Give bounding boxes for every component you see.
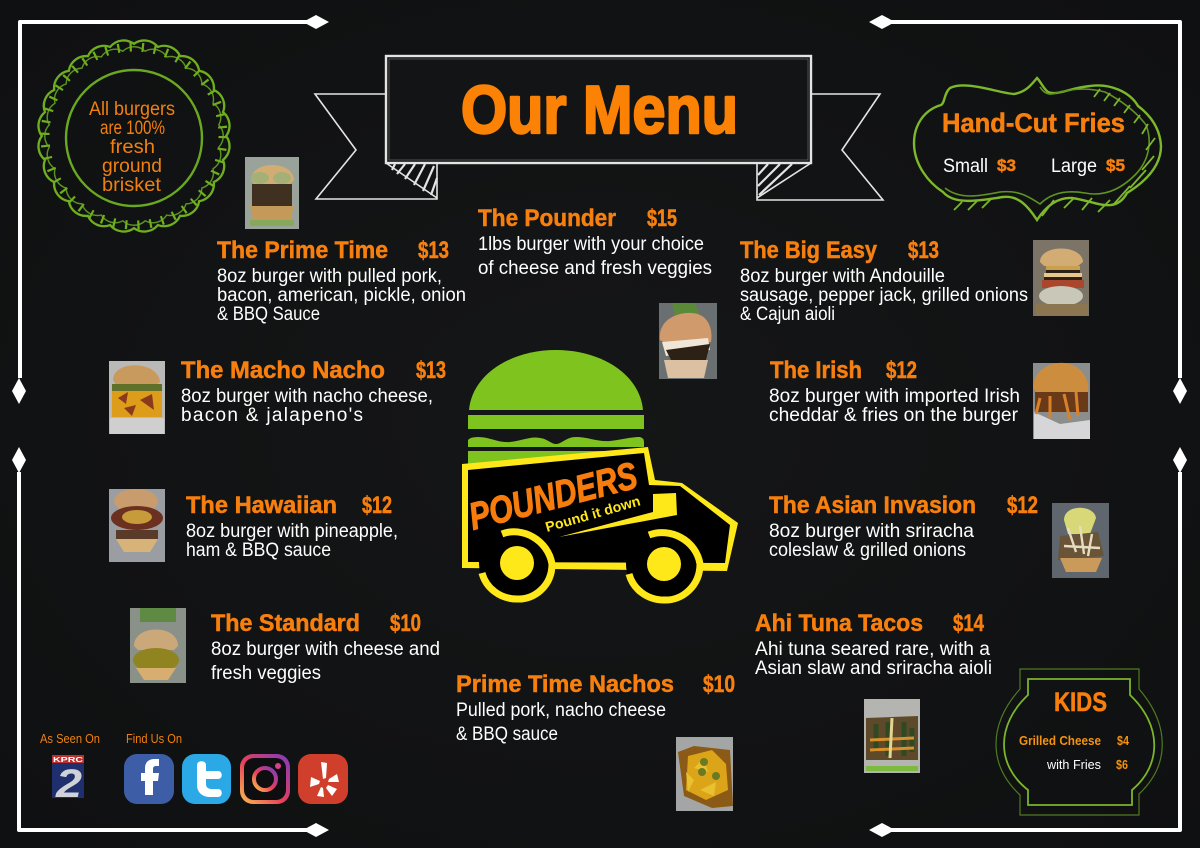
photo: hawaiian burger <box>109 489 165 562</box>
item: The Asian Invasion <box>769 492 1038 561</box>
panel: hand-cut fries: $5 <box>1106 156 1125 175</box>
photo: macho nacho burger <box>109 361 165 434</box>
icon: burger <box>468 350 644 471</box>
item: Prime Time Nachos: Pulled pork, nacho cheese <box>456 700 666 721</box>
icon: KPRC 2: KPRC <box>53 757 83 764</box>
item: The Macho Nacho: bacon & jalapeno's <box>181 405 363 426</box>
item: The Prime Time: The Prime Time <box>217 237 388 264</box>
item: The Pounder: $15 <box>647 205 677 232</box>
item: The Prime Time: $13 <box>418 237 449 264</box>
item: The Asian Invasion: The Asian Invasion <box>769 492 976 519</box>
item: The Macho Nacho: 8oz burger with nacho cheese, <box>181 386 433 407</box>
photo: pounder burger <box>659 303 717 379</box>
item: The Hawaiian: The Hawaiian <box>186 492 337 519</box>
logo: pounders food truck <box>462 350 738 602</box>
item: The Big Easy <box>740 237 1028 325</box>
item: The Irish: The Irish <box>770 357 862 384</box>
item: The Big Easy: & Cajun aioli <box>740 304 835 325</box>
panel: kids menu: $6 <box>1116 758 1128 772</box>
item: The Prime Time: bacon, american, pickle, onion <box>217 285 466 306</box>
logo text: Pound it down: Pound it down <box>543 492 642 535</box>
item: The Asian Invasion: $12 <box>1007 492 1038 519</box>
item: Prime Time Nachos <box>456 671 735 745</box>
item: The Irish: cheddar & fries on the burger <box>769 405 1019 426</box>
photo: prime time burger <box>245 157 299 229</box>
panel: hand-cut fries: Small <box>943 156 988 177</box>
item: Ahi Tuna Tacos: Asian slaw and sriracha aioli <box>755 658 992 679</box>
photo: big easy burger <box>1033 240 1089 316</box>
badge: all burgers: fresh <box>110 137 155 158</box>
badge: all burgers: ground <box>102 156 162 177</box>
icon: truck <box>462 447 738 602</box>
item: The Asian Invasion: 8oz burger with sriracha <box>769 521 974 542</box>
badge: all burgers: brisket <box>102 175 162 196</box>
item: The Standard <box>211 610 440 684</box>
item: The Hawaiian: ham & BBQ sauce <box>186 540 331 561</box>
logo text: Pounders: POUNDERS <box>465 455 642 539</box>
icon: KPRC 2: 2 <box>55 762 82 806</box>
item: Ahi Tuna Tacos <box>755 610 992 679</box>
item: The Big Easy: $13 <box>908 237 939 264</box>
photo: ahi tuna tacos <box>864 699 920 773</box>
label: find us on: Find Us On <box>126 731 182 746</box>
item: Ahi Tuna Tacos: Ahi tuna seared rare, with a <box>755 639 990 660</box>
item: The Standard: fresh veggies <box>211 663 321 684</box>
panel: hand-cut fries: Large <box>1051 156 1097 177</box>
icon: facebook <box>124 754 174 804</box>
item: Prime Time Nachos: & BBQ sauce <box>456 724 558 745</box>
item: The Irish <box>769 357 1020 426</box>
heading: Our Menu: Our Menu <box>461 72 738 148</box>
icon: instagram <box>240 754 290 804</box>
badge: all burgers <box>35 37 233 235</box>
item: The Pounder <box>478 205 712 279</box>
item: The Hawaiian: $12 <box>362 492 392 519</box>
item: The Macho Nacho: The Macho Nacho <box>181 357 385 384</box>
icon: twitter <box>182 754 231 804</box>
badge: all burgers: All burgers <box>89 99 175 120</box>
item: Ahi Tuna Tacos: $14 <box>953 610 985 637</box>
item: The Macho Nacho: $13 <box>416 357 446 384</box>
photo: asian invasion burger <box>1052 503 1109 578</box>
heading: hand-cut fries: Hand-Cut Fries <box>942 108 1125 138</box>
item: Prime Time Nachos: $10 <box>703 671 735 698</box>
item: Prime Time Nachos: Prime Time Nachos <box>456 671 674 698</box>
label: as seen on: As Seen On <box>40 731 100 746</box>
item: The Standard: 8oz burger with cheese and <box>211 639 440 660</box>
title banner <box>315 56 883 200</box>
item: The Prime Time: 8oz burger with pulled pork, <box>217 266 442 287</box>
panel: hand-cut fries: $3 <box>997 156 1016 175</box>
item: The Asian Invasion: coleslaw & grilled onions <box>769 540 966 561</box>
badge: all burgers: are 100% <box>100 118 165 139</box>
item: The Pounder: 1lbs burger with your choice <box>478 234 704 255</box>
item: Ahi Tuna Tacos: Ahi Tuna Tacos <box>755 610 923 637</box>
item: The Big Easy: sausage, pepper jack, grilled onions <box>740 285 1028 306</box>
panel: kids menu: with Fries <box>1046 757 1101 772</box>
item: The Macho Nacho <box>181 357 446 426</box>
panel: kids menu: $4 <box>1117 734 1129 748</box>
heading: kids: KIDS <box>1054 687 1107 717</box>
panel: kids menu: Grilled Cheese <box>1019 734 1101 748</box>
item: The Hawaiian <box>186 492 398 561</box>
item: The Big Easy: 8oz burger with Andouille <box>740 266 945 287</box>
item: The Irish: 8oz burger with imported Irish <box>769 386 1020 407</box>
item: The Big Easy: The Big Easy <box>740 237 878 264</box>
icon: yelp <box>298 754 348 804</box>
photo: prime time nachos <box>676 737 733 811</box>
photo: standard burger <box>130 608 186 683</box>
item: The Prime Time: & BBQ Sauce <box>217 304 320 325</box>
photo: irish burger <box>1033 363 1090 439</box>
item: The Hawaiian: 8oz burger with pineapple, <box>186 521 398 542</box>
icon: KPRC 2 <box>52 755 84 806</box>
item: The Pounder: of cheese and fresh veggies <box>478 258 712 279</box>
item: The Prime Time <box>217 237 466 325</box>
item: The Standard: $10 <box>390 610 421 637</box>
item: The Irish: $12 <box>886 357 917 384</box>
panel: hand-cut fries <box>914 78 1161 220</box>
item: The Standard: The Standard <box>211 610 360 637</box>
item: The Pounder: The Pounder <box>478 205 616 232</box>
panel: kids menu <box>996 669 1162 815</box>
